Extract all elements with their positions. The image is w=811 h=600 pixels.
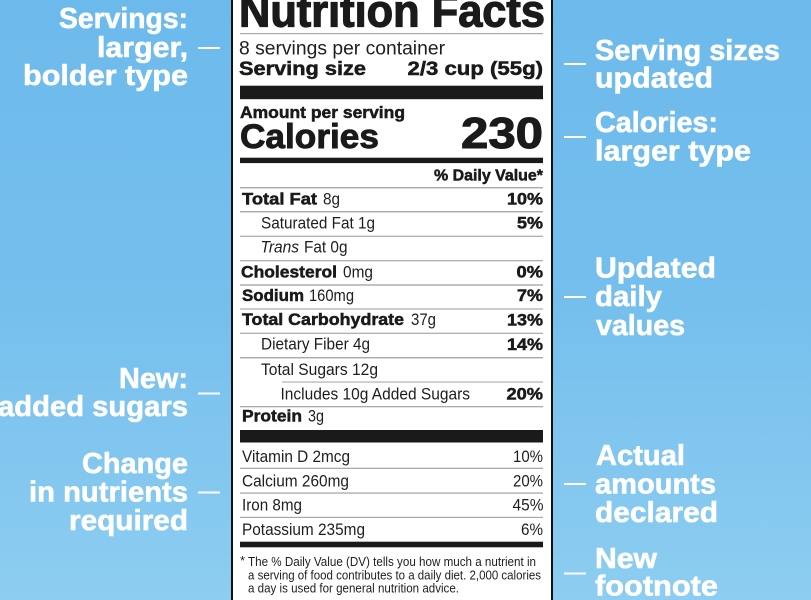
- row: sodium: 160mg: [309, 287, 354, 305]
- row: iron: 45%: [512, 497, 544, 515]
- row: sodium: [242, 287, 543, 305]
- row: total carbohydrate: Total Carbohydrate: [242, 311, 404, 329]
- row: dietary fiber: Dietary Fiber 4g: [261, 336, 370, 354]
- text: footnote: a serving of food contributes to a daily diet. 2,000 calories: [248, 567, 541, 582]
- row: sodium: 7%: [517, 287, 543, 305]
- callout: serving sizes updated: updated: [595, 62, 713, 94]
- text: footnote: The % Daily Value (DV) tells you how much a nutrient in: [248, 554, 536, 569]
- row: vitamin D: Vitamin D 2mcg: [242, 448, 350, 466]
- text: percent daily value header: % Daily Value*: [434, 168, 544, 184]
- callout: updated daily values: daily: [595, 281, 662, 313]
- row: potassium: Potassium 235mg: [242, 521, 365, 539]
- row: total carbohydrate: 13%: [507, 312, 543, 330]
- row: trans fat: [260, 239, 348, 257]
- callout: calories larger type: Calories:: [595, 107, 718, 139]
- callout: new footnote: [564, 543, 718, 600]
- row: cholesterol: [241, 264, 543, 282]
- row: potassium: [242, 521, 543, 539]
- row: total carbohydrate: 37g: [411, 311, 436, 329]
- row: calcium: 20%: [513, 472, 543, 490]
- callout: servings larger, bolder type: larger,: [97, 32, 188, 64]
- callout: change in nutrients required: required: [69, 505, 188, 537]
- row: dietary fiber: 14%: [507, 336, 543, 354]
- row: added sugars: Includes 10g Added Sugars: [280, 386, 470, 404]
- callout: servings larger, bolder type: bolder type: [23, 60, 188, 92]
- row: potassium: 6%: [521, 521, 543, 539]
- text: footnote: *: [240, 553, 245, 568]
- row: cholesterol: Cholesterol: [241, 264, 337, 282]
- row: serving size: [239, 59, 543, 80]
- callout: serving sizes updated: [564, 35, 780, 94]
- callout: updated daily values: Updated: [595, 252, 716, 284]
- row: iron: Iron 8mg: [242, 497, 302, 515]
- row: total fat: Total Fat: [242, 190, 318, 208]
- row: vitamin D: [242, 448, 543, 466]
- row: calories: [240, 109, 543, 158]
- row: calcium: [242, 472, 543, 490]
- row: calcium: Calcium 260mg: [242, 472, 349, 490]
- callout: serving sizes updated: Serving sizes: [595, 35, 780, 67]
- callout: updated daily values: values: [596, 310, 685, 342]
- row: serving size: Serving size: [239, 59, 366, 80]
- callout: calories larger type: larger type: [595, 136, 751, 168]
- text: servings per container: 8 servings per container: [239, 38, 446, 60]
- callout: servings larger, bolder type: [23, 3, 220, 92]
- row: total fat: 10%: [507, 190, 543, 208]
- callout: new added sugars: [0, 363, 220, 423]
- callout: calories larger type: [564, 107, 751, 168]
- row: sodium: Sodium: [242, 287, 304, 305]
- callout: new added sugars: added sugars: [0, 391, 188, 423]
- row: iron: [242, 497, 544, 515]
- row: calories: Calories: [240, 118, 379, 156]
- callout: new footnote: New: [595, 543, 657, 575]
- callout: change in nutrients required: Change: [82, 448, 188, 480]
- text: footnote: [240, 553, 541, 596]
- row: total fat: 8g: [323, 190, 340, 208]
- row: protein: Protein: [242, 408, 302, 426]
- callout: change in nutrients required: [29, 448, 220, 537]
- row: protein: [242, 408, 324, 426]
- callout: change in nutrients required: in nutrients: [29, 476, 188, 508]
- callout: new added sugars: New:: [119, 363, 188, 395]
- row: trans fat: Trans: [260, 239, 299, 257]
- row: added sugars: 20%: [506, 386, 543, 404]
- row: saturated fat: 5%: [517, 214, 543, 232]
- row: total fat: [242, 190, 543, 208]
- row: dietary fiber: [261, 336, 543, 354]
- text: amount per serving: Amount per serving: [240, 104, 405, 122]
- row: saturated fat: Saturated Fat 1g: [261, 214, 375, 232]
- row: cholesterol: 0%: [516, 264, 543, 282]
- row: vitamin D: 10%: [513, 448, 543, 466]
- row: saturated fat: [261, 214, 543, 232]
- callout: servings larger, bolder type: Servings:: [59, 3, 188, 35]
- callout: actual amounts declared: [564, 440, 718, 529]
- row: trans fat: Fat 0g: [304, 239, 348, 257]
- row: protein: 3g: [308, 408, 324, 426]
- row: cholesterol: 0mg: [343, 264, 373, 282]
- row: serving size: 2/3 cup (55g): [408, 59, 543, 80]
- text: footnote: a day is used for general nutrition advice.: [248, 580, 459, 596]
- callout: actual amounts declared: Actual: [596, 440, 685, 472]
- callout: actual amounts declared: declared: [595, 497, 718, 529]
- row: total carbohydrate: [242, 311, 543, 330]
- callout: actual amounts declared: amounts: [595, 468, 716, 500]
- panel: nutrition facts label: [231, 0, 553, 600]
- row: total sugars: Total Sugars 12g: [261, 361, 378, 379]
- callout: updated daily values: [564, 252, 716, 342]
- row: calories: 230: [461, 109, 543, 158]
